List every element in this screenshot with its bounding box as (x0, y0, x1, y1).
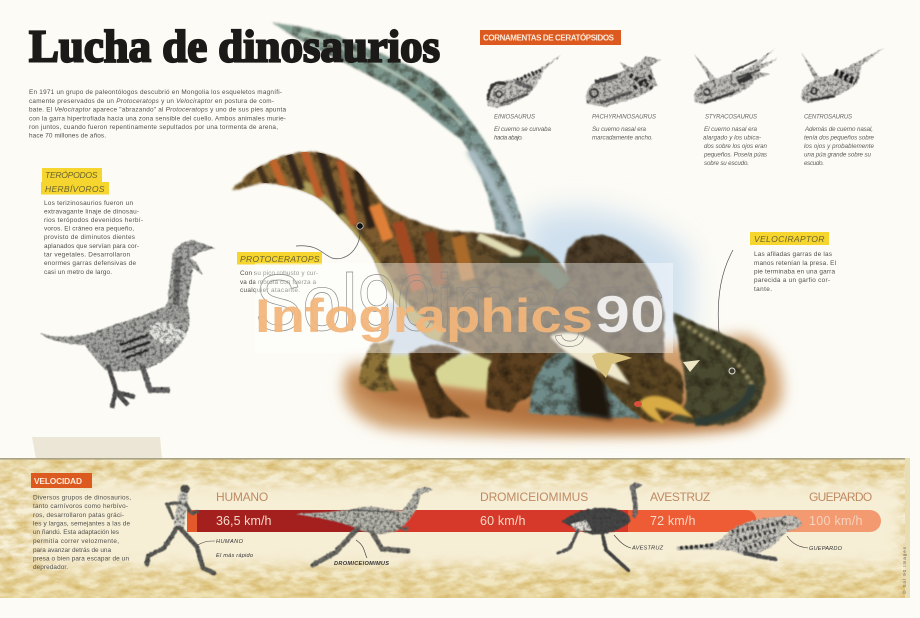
text block (33, 494, 131, 571)
text block: para avanzar detrás de una (33, 547, 111, 554)
intro text: con la garra hipertrofiada hacia una zona sensible del cuello. Ambos animales murie- (29, 116, 286, 122)
callout: velociraptor: manos retenían la presa. El (754, 260, 836, 267)
text: styracosaurus: dos sobre los ojos eran (704, 143, 768, 150)
icon: masking tape (32, 437, 162, 459)
text: pachyrhinosaurus: marcadamente ancho. (592, 134, 653, 142)
callout: velociraptor (718, 232, 836, 374)
bar chart: speed: AVESTRUZ (650, 490, 711, 504)
callout: velociraptor: tante. (754, 286, 772, 293)
panel: cornamentas de ceratópsidos (480, 30, 884, 167)
heading tag: TERÓPODOS (45, 170, 98, 180)
icon: styracosaurus skull (694, 48, 778, 104)
callout: protoceratops: va da mordía con fuerza a (240, 279, 316, 286)
watermark: Sol90images (255, 258, 665, 347)
watermark: 90 (595, 286, 665, 344)
text: einiosaurus (494, 114, 552, 142)
illustration: therizinosaur (40, 240, 215, 408)
text block: aplanados que servían para cor- (44, 243, 139, 250)
bar chart: speed: HUMANO (216, 490, 269, 504)
protoceratops frill (565, 235, 664, 362)
pale arm (550, 333, 630, 385)
text: styracosaurus: sobre su escudo. (704, 160, 749, 167)
text block: les y largas, semejantes a las de (33, 520, 130, 528)
title: Lucha de dinosaurios (29, 20, 440, 72)
callout: protoceratops: Con su pico robusto y cur- (240, 270, 318, 277)
text: centrosaurus: los ojos y probablemente (804, 143, 875, 150)
callout: velociraptor: Las afiladas garras de las (754, 251, 832, 258)
heading tag: VELOCIDAD (34, 476, 82, 486)
bar chart: speed: 100 km/h (809, 514, 863, 528)
heading tag: CORNAMENTAS DE CERATÓPSIDOS (483, 34, 615, 42)
icon: human runner (147, 484, 214, 573)
label: avestruz: AVESTRUZ (631, 546, 664, 552)
icon: dromiceiomimus (295, 487, 433, 565)
legs (360, 340, 400, 392)
ground (344, 335, 782, 436)
text block (44, 200, 143, 276)
label: humano (197, 539, 253, 559)
intro text (29, 89, 286, 140)
credit: © Sol 90 Images (901, 546, 907, 594)
bar chart: speed: 72 km/h (650, 514, 696, 528)
text: einiosaurus: hacia abajo. (494, 134, 523, 142)
icon: einiosaurus skull (487, 55, 561, 108)
icon: cheetah (677, 516, 801, 559)
text: centrosaurus: CENTROSAURUS (804, 114, 852, 120)
label: guepardo (787, 536, 843, 552)
panel: velocidad (0, 458, 910, 598)
label: dromiceiomimus (334, 540, 389, 567)
text block: enormes garras defensivas de (44, 260, 136, 267)
text block: casi un metro de largo. (44, 269, 112, 276)
velociraptor belly feathers (530, 352, 640, 418)
label: dromiceiomimus: DROMICEIOMIMUS (334, 561, 389, 567)
bar chart: speed: DROMICEIOMIMUS (480, 490, 589, 504)
text block: tanto carnívoros como herbívo- (33, 503, 128, 510)
heading tag (31, 473, 92, 488)
feather tail of velociraptor (273, 23, 526, 238)
text: centrosaurus: escudo. (804, 160, 824, 167)
text: einiosaurus: EINIOSAURUS (494, 114, 535, 120)
panel background (0, 458, 910, 598)
text block: tar vegetales. Desarrollaron (44, 252, 130, 258)
intro text: hace 70 millones de años. (29, 132, 106, 140)
heading tag: HERBÍVOROS (45, 184, 105, 194)
callout: protoceratops: PROTOCERATOPS (240, 254, 320, 264)
protoceratops head (583, 350, 684, 422)
text block: un ñandú. Esta adaptación les (33, 529, 119, 536)
text block: Diversos grupos de dinosaurios, (33, 494, 131, 502)
protoceratops body and tail (232, 152, 590, 372)
text: styracosaurus (703, 114, 768, 167)
watermark: Infographics (255, 289, 593, 342)
text block: provisto de diminutos dientes (44, 234, 135, 241)
icon: centrosaurus skull (801, 48, 884, 103)
label: guepardo: GUEPARDO (809, 546, 843, 552)
heading tag (480, 30, 621, 45)
text block: ros, desarrollaron patas gráci- (33, 512, 124, 519)
text block: depredador. (33, 564, 68, 571)
callout: velociraptor: parecida a un garfio cor- (754, 277, 830, 284)
text: pachyrhinosaurus: PACHYRHINOSAURUS (592, 114, 656, 120)
text block: Los terizinosaurios fueron un (44, 200, 133, 207)
callout: protoceratops (237, 223, 363, 294)
yellow claw (638, 396, 694, 424)
label: avestruz (614, 535, 664, 552)
intro text: En 1971 un grupo de paleontólogos descubrió en Mongolia los esqueletos magnífi- (29, 89, 282, 96)
panel: terópodos herbívoros (40, 168, 215, 408)
text: styracosaurus: pequeños. Poseía púas (703, 152, 767, 158)
text: pachyrhinosaurus (592, 114, 656, 142)
label: humano: El más rápido (216, 553, 253, 559)
text block: presa o bien para escapar de un (33, 556, 129, 562)
bar chart: speed (187, 490, 881, 532)
illustration: battle scene (232, 23, 782, 436)
velociraptor back and head (668, 312, 765, 425)
text: einiosaurus: El cuerno se curvaba (494, 126, 552, 133)
text: centrosaurus: Además de cuerno nasal, (804, 126, 873, 133)
text: centrosaurus (804, 114, 875, 167)
text block: permitía correr velozmente, (33, 538, 119, 545)
sky wash (525, 210, 690, 340)
bar chart: speed: GUEPARDO (809, 490, 873, 504)
callout: velociraptor: VELOCIRAPTOR (754, 234, 825, 244)
text: styracosaurus: El cuerno nasal era (704, 126, 758, 133)
text block: rios terópodos devenidos herbí- (44, 217, 143, 224)
claws of hand (592, 352, 632, 378)
text: centrosaurus: una púa grande sobre su (804, 152, 872, 158)
text block: voros. El cráneo era pequeño, (44, 226, 134, 232)
text: styracosaurus: alargado y los ubica- (703, 134, 761, 142)
field horizon (382, 353, 560, 392)
leader line (296, 226, 360, 259)
text: styracosaurus: STYRACOSAURUS (705, 114, 757, 120)
intro text: bate. El Velociraptor aparece "abrazando" al Protoceratops y uno de sus pies apunta (29, 106, 286, 114)
heading tag (41, 168, 109, 194)
callout: protoceratops: cualquier atacante. (240, 287, 300, 294)
label: humano: HUMANO (216, 539, 244, 545)
text: centrosaurus: tenía dos pequeños sobre (804, 134, 875, 142)
text: pachyrhinosaurus: Su cuerno nasal era (592, 126, 647, 133)
callout: velociraptor: pie terminaba en una garra (754, 268, 835, 276)
bar chart: speed: 36,5 km/h (216, 514, 272, 528)
intro text: ron juntos, cuando fueron repentinamente sepultados por una tormenta de arena, (29, 124, 278, 131)
icon: pachyrhinosaurus skull (586, 56, 661, 107)
bar chart: speed: 60 km/h (480, 514, 526, 528)
body colour patches and orange stripes (258, 150, 565, 340)
icon: ostrich (558, 483, 642, 570)
text block: extravagante linaje de dinosau- (44, 208, 139, 216)
intro text: camente preservados de un Protoceratops y un Velociraptor en postura de com- (29, 98, 274, 105)
